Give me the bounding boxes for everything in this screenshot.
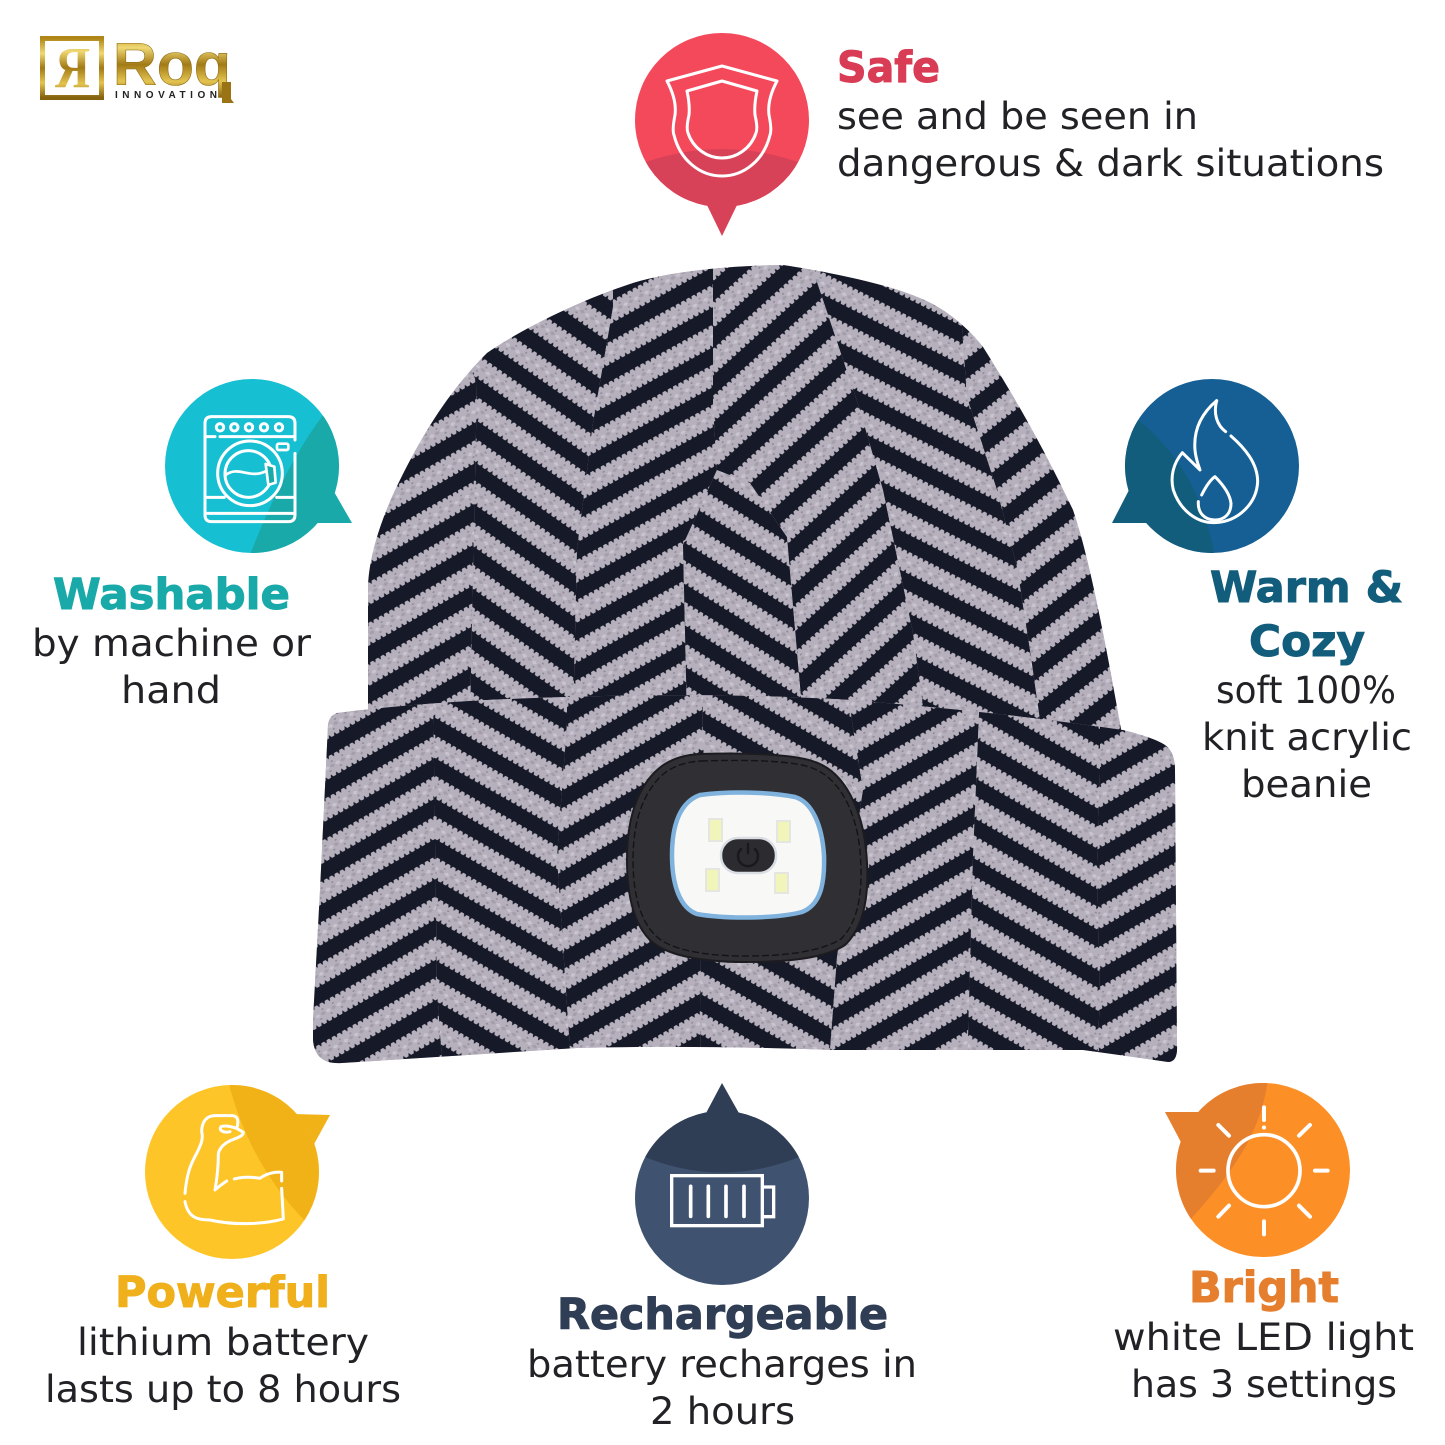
heading: Rechargeable: Rechargeable bbox=[557, 1290, 888, 1340]
text: Bright description bbox=[1113, 1316, 1414, 1406]
text: Warm description: soft 100% bbox=[1216, 669, 1396, 712]
text: Powerful description: lasts up to 8 hours bbox=[45, 1368, 401, 1411]
heading: Safe: Safe bbox=[837, 43, 940, 93]
text: Safe description: see and be seen in bbox=[837, 95, 1198, 138]
LED 2 bbox=[777, 821, 790, 842]
logo wordmark: Roq bbox=[113, 31, 231, 98]
heading: Warm & Cozy: Warm & bbox=[1210, 563, 1403, 613]
text: Rechargeable description bbox=[527, 1343, 917, 1433]
text: Safe description bbox=[837, 95, 1384, 185]
product photo: herringbone LED beanie bbox=[300, 250, 1190, 1080]
heading: Powerful: Powerful bbox=[115, 1268, 330, 1318]
text: Powerful description: lithium battery bbox=[77, 1321, 369, 1364]
LED lens bbox=[672, 793, 824, 918]
icon: flame bbox=[1112, 379, 1299, 560]
logo: Roq Innovation bbox=[42, 31, 234, 103]
heading: Warm & Cozy bbox=[1210, 563, 1403, 667]
logo tagline: INNOVATION bbox=[115, 90, 217, 101]
callout: Rechargeable bbox=[527, 1083, 917, 1433]
text: Warm description: knit acrylic bbox=[1202, 716, 1412, 759]
callout: Warm and Cozy bbox=[1112, 379, 1412, 806]
LED 4 bbox=[775, 873, 788, 893]
callout: Safe bbox=[630, 33, 1384, 236]
text: Rechargeable description: battery recharges in bbox=[527, 1343, 917, 1386]
callout: Powerful bbox=[45, 1080, 401, 1411]
icon: washing machine bbox=[165, 379, 352, 560]
text: Bright description: white LED light bbox=[1113, 1316, 1414, 1359]
icon: shield pin bbox=[630, 33, 814, 236]
text: Warm description bbox=[1202, 669, 1412, 806]
LED 3 bbox=[706, 869, 719, 891]
power button bbox=[721, 838, 776, 873]
text: Bright description: has 3 settings bbox=[1131, 1363, 1397, 1406]
text: Washable description bbox=[32, 622, 312, 712]
text: Washable description: by machine or bbox=[32, 622, 312, 665]
LED 1 bbox=[709, 819, 722, 841]
callout: Washable bbox=[32, 379, 352, 712]
text: Powerful description bbox=[45, 1321, 401, 1411]
text: Warm description: beanie bbox=[1241, 763, 1372, 806]
text: Rechargeable description: 2 hours bbox=[650, 1390, 795, 1433]
LED headlamp patch bbox=[627, 753, 867, 962]
text: Washable description: hand bbox=[121, 669, 221, 712]
callout: Bright bbox=[1113, 1078, 1414, 1406]
beanie cuff bbox=[300, 690, 1190, 1080]
logo mark: Я bbox=[55, 35, 90, 100]
icon: flexed arm bbox=[145, 1080, 330, 1259]
heading: Washable: Washable bbox=[53, 570, 290, 620]
text: Safe description: dangerous & dark situations bbox=[837, 142, 1384, 185]
heading: Warm & Cozy: Cozy bbox=[1249, 617, 1365, 667]
icon: battery pin bbox=[635, 1083, 809, 1285]
heading: Bright: Bright bbox=[1189, 1263, 1339, 1313]
icon: sun bbox=[1165, 1078, 1350, 1257]
beanie crown bbox=[368, 265, 1122, 730]
